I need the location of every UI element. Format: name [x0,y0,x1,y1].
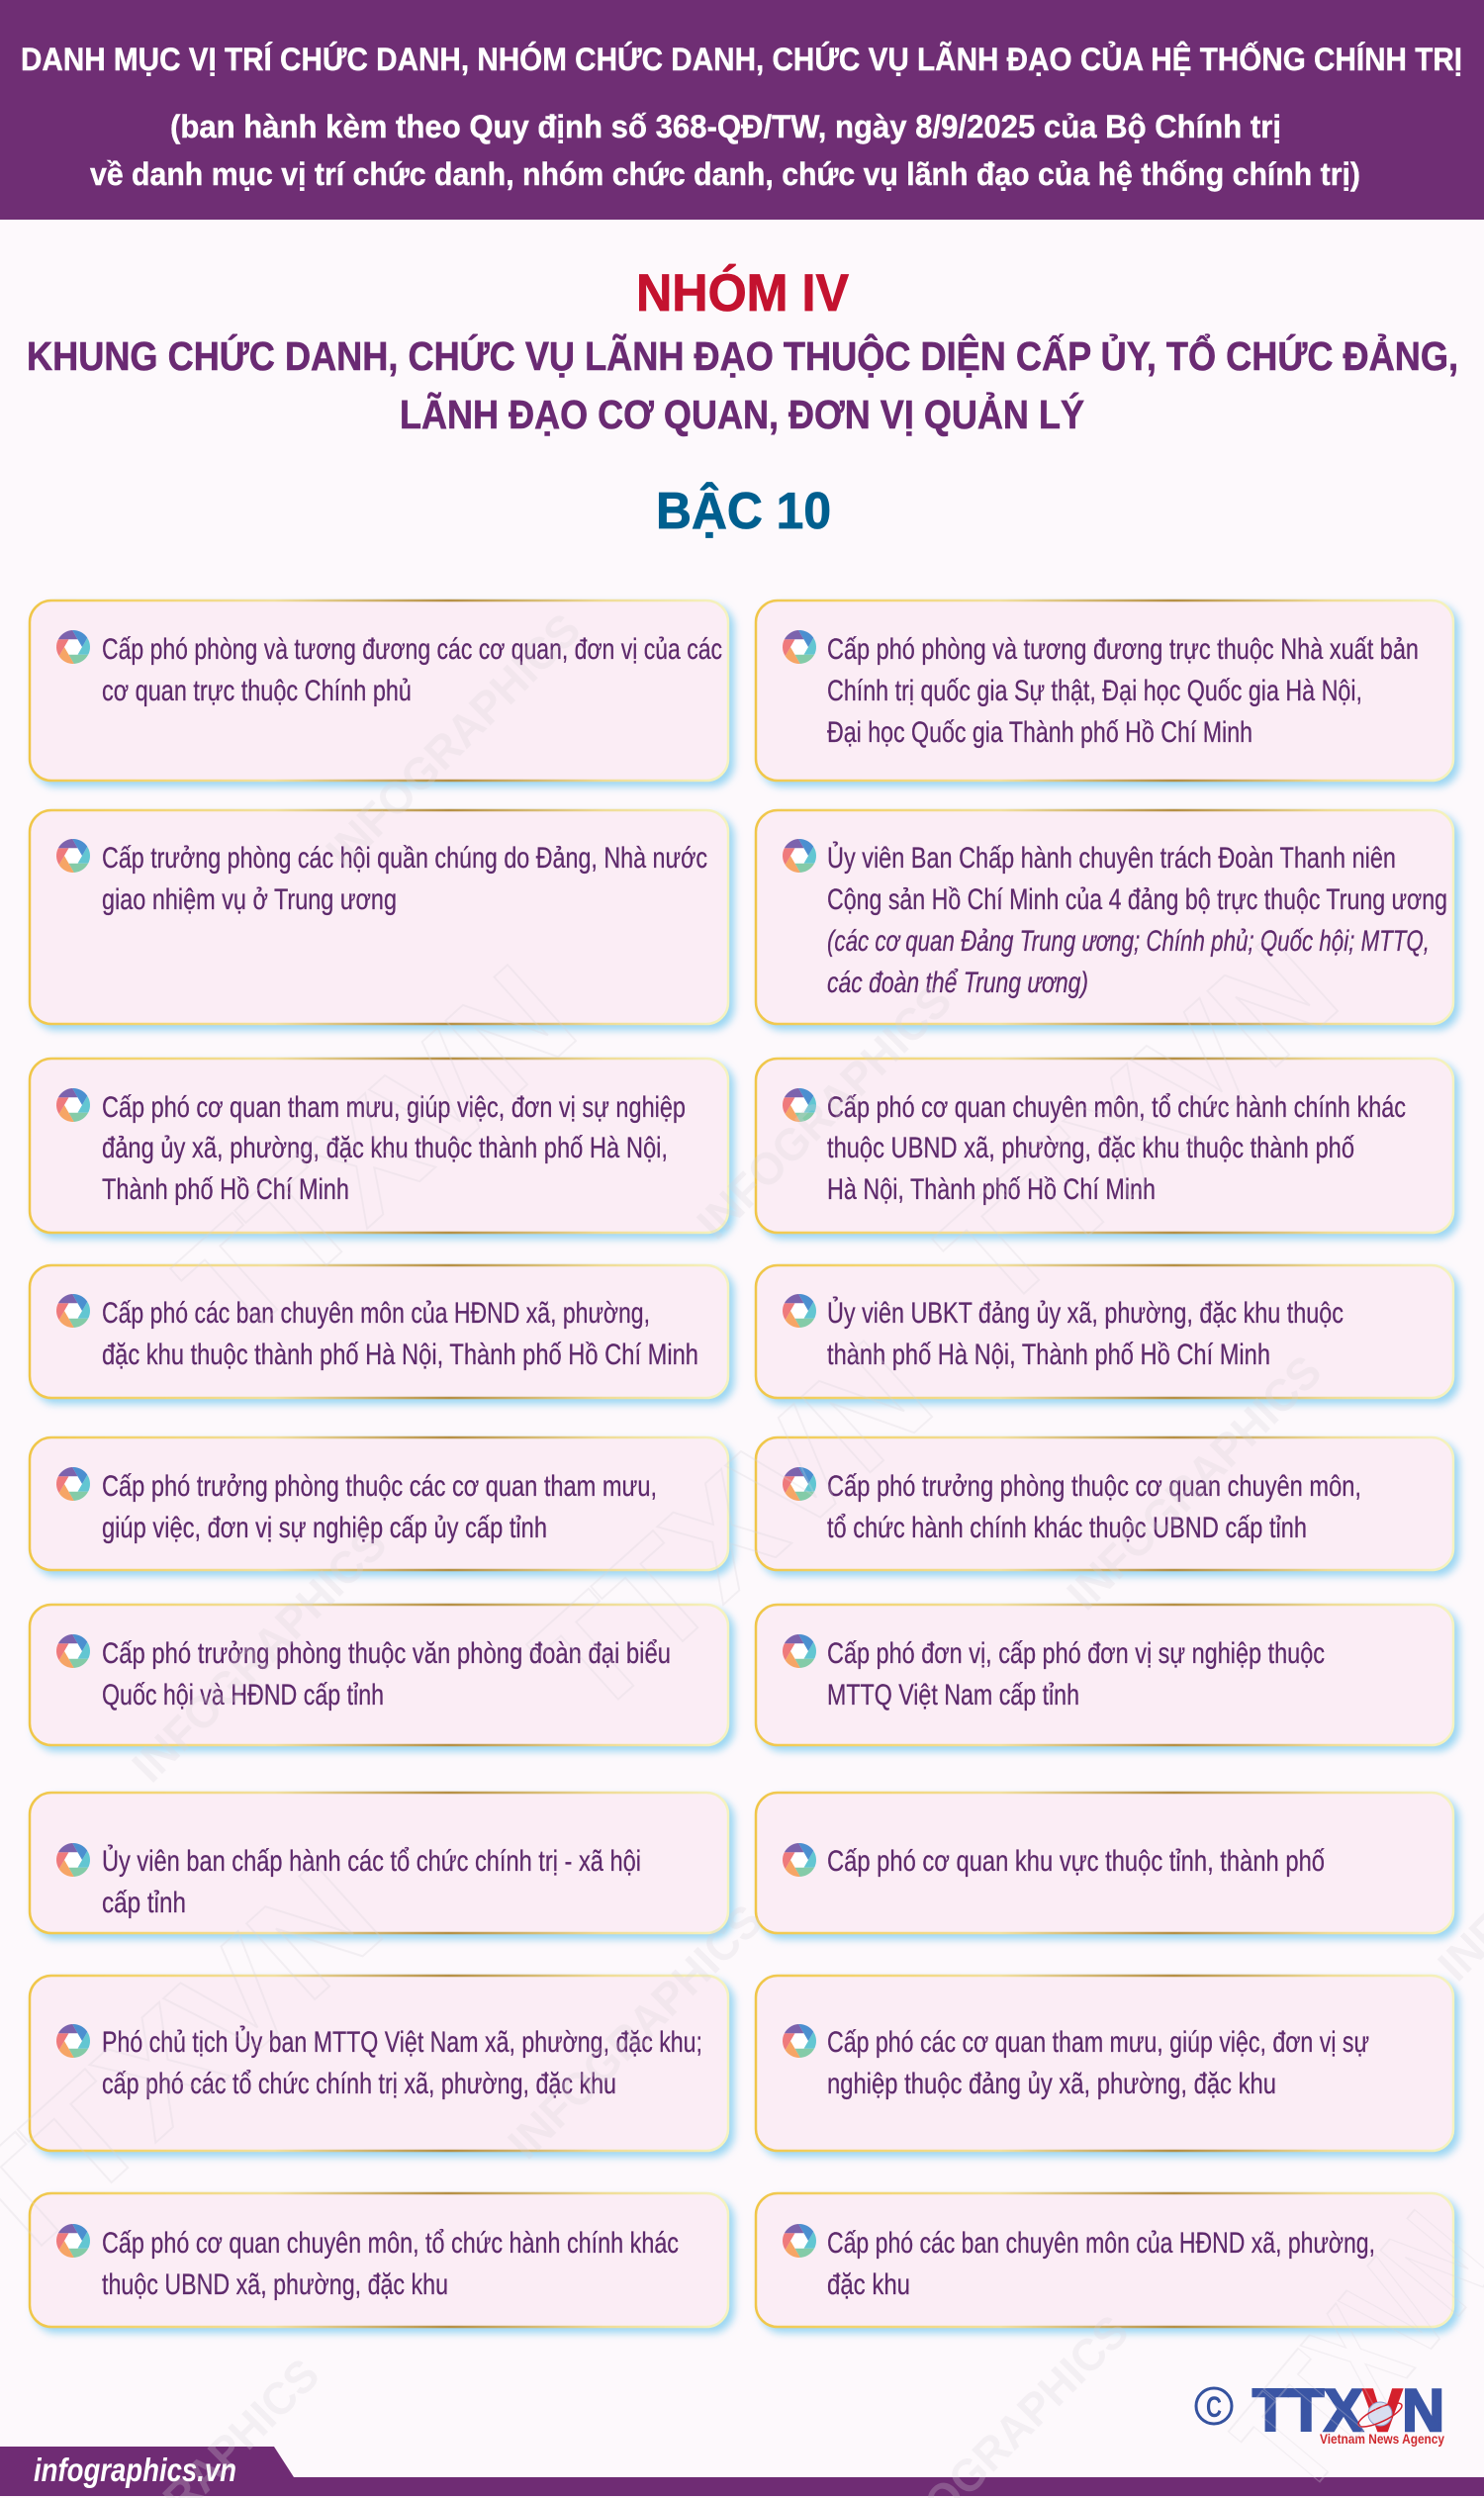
card text: giao nhiệm vụ ở Trung ương [102,883,397,916]
card text [102,1091,686,1206]
card text: giúp việc, đơn vị sự nghiệp cấp ủy cấp tỉnh [102,1512,547,1544]
icon: aperture [783,1086,816,1124]
card text: Đại học Quốc gia Thành phố Hồ Chí Minh [827,716,1252,749]
heading: group description: LÃNH ĐẠO CƠ QUAN, ĐƠN VỊ QUẢN LÝ [400,392,1084,437]
icon: copyright mark: C [1206,2391,1222,2424]
card text: cấp tỉnh [102,1887,186,1919]
agency tagline: Vietnam News Agency [1320,2431,1444,2447]
logo: TTXVN copyright [1196,2377,1444,2447]
card: row 7 left [30,1793,728,1933]
card: row 2 right [756,810,1453,1024]
card text [102,842,707,916]
icon: aperture [783,837,816,875]
icon: aperture [56,1086,90,1124]
card text [827,1296,1344,1371]
card: row 4 left [30,1265,728,1398]
card text: Ủy viên UBKT đảng ủy xã, phường, đặc khu thuộc [827,1296,1344,1330]
card: row 9 left [30,2193,728,2327]
card text [827,841,1447,999]
card text [102,1844,641,1919]
card text: Cấp phó cơ quan chuyên môn, tổ chức hành chính khác [102,2227,679,2260]
watermark pattern: INFOGRAPHICS [498,1895,772,2169]
watermark pattern: TTXVN [504,1310,961,1745]
icon: aperture [56,1465,90,1503]
card: row 8 right [756,1976,1453,2151]
card text: nghiệp thuộc đảng ủy xã, phường, đặc khu [827,2068,1276,2100]
card text [827,633,1419,749]
card: row 3 left [30,1059,728,1233]
card text: Cấp phó các ban chuyên môn của HĐND xã, phường, [102,1297,650,1330]
card text: thành phố Hà Nội, Thành phố Hồ Chí Minh [827,1339,1270,1371]
card: row 5 left [30,1437,728,1570]
card text [102,1637,671,1712]
card text [102,2227,679,2301]
card text: thuộc UBND xã, phường, đặc khu [102,2268,448,2301]
card: row 1 left [30,601,728,781]
card text [827,2227,1375,2301]
header subtitle: về danh mục vị trí chức danh, nhóm chức danh, chức vụ lãnh đạo của hệ thống chính trị) [90,156,1360,192]
card text: Cấp phó phòng và tương đương các cơ quan, đơn vị của các [102,633,722,666]
watermark pattern: INFOGRAPHICS [687,974,961,1249]
card text [102,633,722,707]
card text: đặc khu thuộc thành phố Hà Nội, Thành phố Hồ Chí Minh [102,1339,698,1371]
card text: cấp phó các tổ chức chính trị xã, phường, đặc khu [102,2068,616,2100]
card text [102,1297,698,1371]
card text: đảng ủy xã, phường, đặc khu thuộc thành phố Hà Nội, [102,1132,668,1164]
icon: aperture [783,1292,816,1330]
watermark pattern: TTXVN [147,934,604,1369]
watermark pattern [0,603,1484,2498]
icon: aperture [56,1841,90,1879]
watermark pattern: INFOGRAPHICS [1057,1345,1331,1619]
card: row 9 right [756,2193,1453,2327]
footer site name: infographics.vn [34,2452,236,2488]
card: row 3 right [756,1059,1453,1233]
watermark pattern: INFOGRAPHICS [122,1518,396,1792]
icon: aperture [783,1465,816,1503]
icon: aperture [783,1841,816,1879]
watermark pattern: INFOGRAPHICS [316,603,590,878]
card text: Thành phố Hồ Chí Minh [102,1173,349,1206]
icon: globe [1355,2399,1405,2431]
icon: aperture [56,628,90,666]
card text: Cấp phó trưởng phòng thuộc các cơ quan tham mưu, [102,1470,657,1503]
card text: đặc khu [827,2268,910,2301]
icon: aperture [783,2222,816,2260]
icon: aperture [783,2022,816,2060]
card text: Cấp phó đơn vị, cấp phó đơn vị sự nghiệp thuộc [827,1637,1325,1670]
header subtitle [90,109,1360,192]
card: row 6 right [756,1605,1453,1745]
card: row 1 right [756,601,1453,781]
header subtitle: (ban hành kèm theo Quy định số 368-QĐ/TW, ngày 8/9/2025 của Bộ Chính trị [170,109,1281,144]
watermark pattern: TTXVN [909,904,1366,1340]
card text: cơ quan trực thuộc Chính phủ [102,675,412,707]
heading: Nhóm IV: NHÓM IV [636,263,849,323]
card text [827,1637,1325,1712]
card text: Cấp phó cơ quan tham mưu, giúp việc, đơn vị sự nghiệp [102,1091,686,1124]
agency wordmark: TTXVN [1252,2377,1444,2444]
icon: aperture [56,1632,90,1670]
icon: aperture [56,1292,90,1330]
icon: copyright mark [1196,2388,1232,2424]
icon: aperture [56,2022,90,2060]
card: row 5 right [756,1437,1453,1570]
card text: MTTQ Việt Nam cấp tỉnh [827,1679,1079,1712]
card text: Hà Nội, Thành phố Hồ Chí Minh [827,1173,1156,1206]
card text [827,1470,1361,1544]
card text: Phó chủ tịch Ủy ban MTTQ Việt Nam xã, phường, đặc khu; [102,2025,702,2059]
card: row 8 left [30,1976,728,2151]
card text [102,2025,702,2100]
card text: Quốc hội và HĐND cấp tỉnh [102,1679,384,1712]
card text [827,2026,1369,2100]
card text: Cấp trưởng phòng các hội quần chúng do Đảng, Nhà nước [102,842,707,875]
card text: thuộc UBND xã, phường, đặc khu thuộc thành phố [827,1132,1354,1164]
icon: aperture [56,837,90,875]
heading: group description [27,332,1458,437]
card: row 2 left [30,810,728,1024]
header band [0,0,1484,220]
card text: tổ chức hành chính khác thuộc UBND cấp tỉnh [827,1512,1307,1544]
card text: Cấp phó trưởng phòng thuộc văn phòng đoàn đại biểu [102,1637,671,1670]
card text [102,1470,657,1544]
card text: Ủy viên ban chấp hành các tổ chức chính trị - xã hội [102,1844,641,1878]
icon: aperture [783,1632,816,1670]
card: row 7 right [756,1793,1453,1933]
heading: Bậc 10: BẬC 10 [656,482,831,540]
card text [827,1091,1406,1206]
card: row 6 left [30,1605,728,1745]
footer bar [0,2447,1484,2496]
card text: Cấp phó cơ quan khu vực thuộc tỉnh, thành phố [827,1845,1325,1878]
card: row 4 right [756,1265,1453,1398]
card text: các đoàn thể Trung ương) [827,967,1088,999]
icon: aperture [783,628,816,666]
icon: aperture [56,2222,90,2260]
